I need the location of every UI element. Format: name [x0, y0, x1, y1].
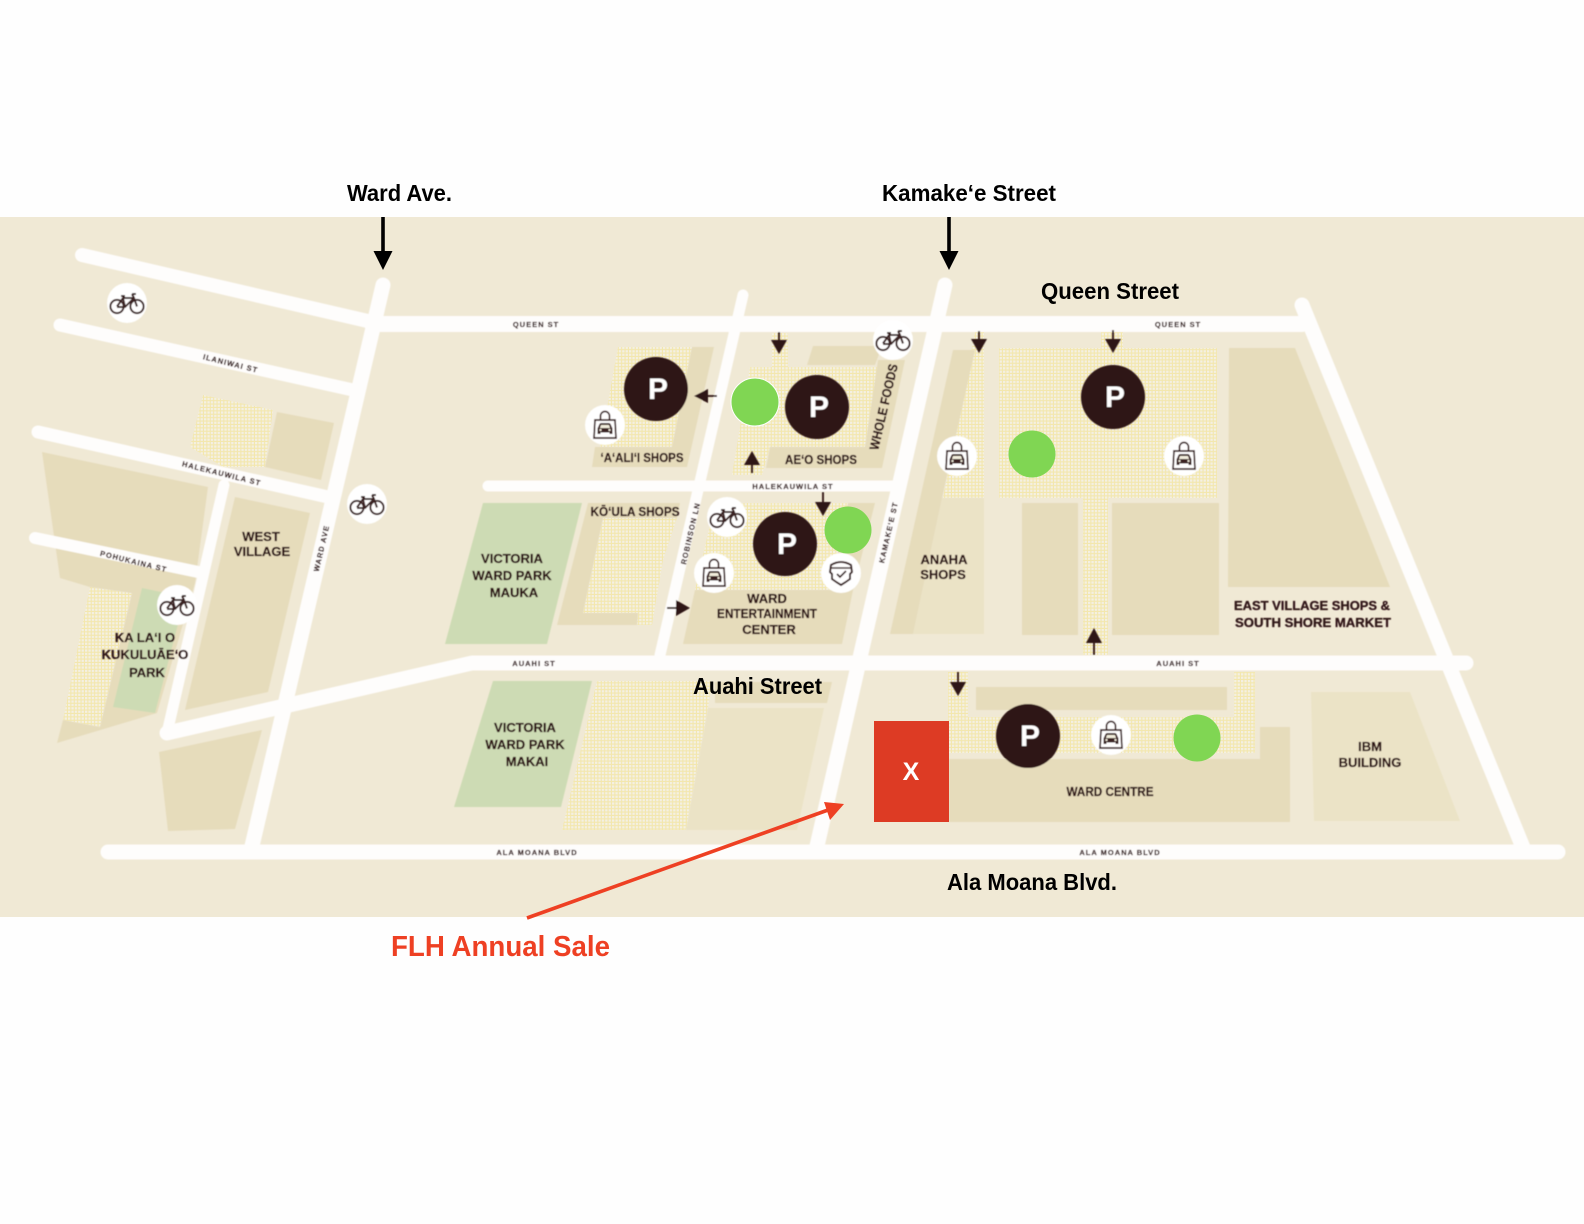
callout arrow: [527, 802, 844, 918]
street labels: ROBINSON LN: [679, 501, 702, 565]
street labels: ALA MOANA BLVD: [496, 848, 578, 857]
place labels: PARK: [129, 665, 166, 680]
place labels: MAKAI: [506, 754, 548, 769]
place labels: EAST VILLAGE SHOPS &: [1234, 598, 1390, 613]
place labels: AE‘O SHOPS: [785, 452, 857, 467]
icon: parking Aalii: P: [648, 373, 668, 406]
heading: Ward Ave: Ward Ave.: [347, 180, 452, 206]
place labels: KUKULUĀE‘O: [102, 647, 188, 662]
icon: parking Aeo: [785, 375, 849, 439]
heading: Ala Moana Blvd: Ala Moana Blvd.: [947, 869, 1117, 895]
sale location marker: [874, 721, 949, 822]
icon: bike park: [157, 585, 197, 625]
place labels: MAUKA: [490, 585, 539, 600]
road network: [35, 255, 1558, 852]
street labels: WARD AVE: [312, 524, 331, 573]
street labels: ILANIWAI ST: [202, 352, 259, 375]
place labels: IBM: [1358, 739, 1382, 754]
place labels: WARD PARK: [472, 568, 552, 583]
icon: shop parking Ward Entertainment: [694, 553, 734, 593]
icon: parking Ward Centre: [996, 704, 1060, 768]
parks: [113, 503, 592, 807]
place labels: ANAHA: [921, 552, 968, 567]
street labels: HALEKAUWILA ST: [181, 459, 262, 488]
arrow: Ward Ave: [374, 217, 392, 270]
icon: parking East Village: P: [1105, 381, 1125, 414]
street labels: ALA MOANA BLVD: [1079, 848, 1161, 857]
sale location marker: X: [903, 758, 920, 786]
icon: bike Ward Ave: [347, 484, 387, 524]
icon: parking Aalii: [624, 357, 688, 421]
place labels: SHOPS: [920, 567, 966, 582]
green marker: Ward Centre: [1174, 714, 1220, 762]
heading: Queen Street: Queen Street: [1041, 278, 1179, 304]
icon: bike Robinson: [707, 497, 747, 537]
street labels: KAMAKE‘E ST: [877, 501, 900, 564]
icon: shop parking East Village: [1164, 436, 1204, 476]
icon: parking Ward Entertainment: [753, 512, 817, 576]
place labels: WARD: [747, 591, 787, 606]
place labels: WARD CENTRE: [1066, 784, 1154, 799]
street labels: AUAHI ST: [1156, 659, 1200, 668]
map panel: [0, 217, 1584, 917]
green marker: Aeo: [731, 378, 779, 426]
place labels: VILLAGE: [234, 544, 290, 559]
small directional arrows: [667, 330, 1121, 696]
place labels: VICTORIA: [494, 720, 557, 735]
street labels: [99, 320, 1201, 857]
pedestrian dot-pattern areas: [63, 332, 1255, 830]
place labels: VICTORIA: [481, 551, 544, 566]
building blocks: [42, 346, 1460, 831]
arrow: Kamakee Street: [940, 217, 958, 270]
place labels: WARD PARK: [485, 737, 565, 752]
street labels: QUEEN ST: [513, 320, 559, 329]
heading: Kamakee Street: Kamake‘e Street: [882, 180, 1056, 206]
green marker: central: [1008, 430, 1056, 478]
heading: Auahi Street: Auahi Street: [693, 673, 822, 699]
icon: shop parking Ward Centre: [1091, 715, 1131, 755]
place labels: KŌ‘ULA SHOPS: [590, 504, 680, 519]
street labels: AUAHI ST: [512, 659, 556, 668]
street labels: QUEEN ST: [1155, 320, 1201, 329]
icon: bike Whole Foods: [873, 320, 913, 360]
icon: parking East Village: [1081, 365, 1145, 429]
icon: parking Aeo: P: [809, 391, 829, 424]
place labels: SOUTH SHORE MARKET: [1235, 615, 1391, 630]
street labels: POHUKAINA ST: [99, 549, 168, 574]
icon: bike northwest: [107, 283, 147, 323]
icon: shop parking Aalii: [585, 405, 625, 445]
icon: parking Ward Centre: P: [1020, 720, 1040, 753]
place labels: [102, 362, 1401, 799]
icon: parking Ward Entertainment: P: [777, 528, 797, 561]
icon: security shield: [821, 553, 861, 593]
icon: shop parking Anaha: [937, 436, 977, 476]
place labels: ‘A‘ALI‘I SHOPS: [600, 450, 684, 465]
place labels: BUILDING: [1339, 755, 1401, 770]
green marker: Ward Entertainment: [824, 506, 872, 554]
callout label: FLH Annual Sale: FLH Annual Sale: [391, 931, 610, 963]
street labels: HALEKAUWILA ST: [752, 482, 834, 491]
place labels: WEST: [242, 529, 280, 544]
place labels: KA LA‘I O: [115, 630, 175, 645]
place labels: WHOLE FOODS: [866, 362, 901, 452]
place labels: ENTERTAINMENT: [717, 606, 817, 621]
place labels: CENTER: [742, 622, 796, 637]
